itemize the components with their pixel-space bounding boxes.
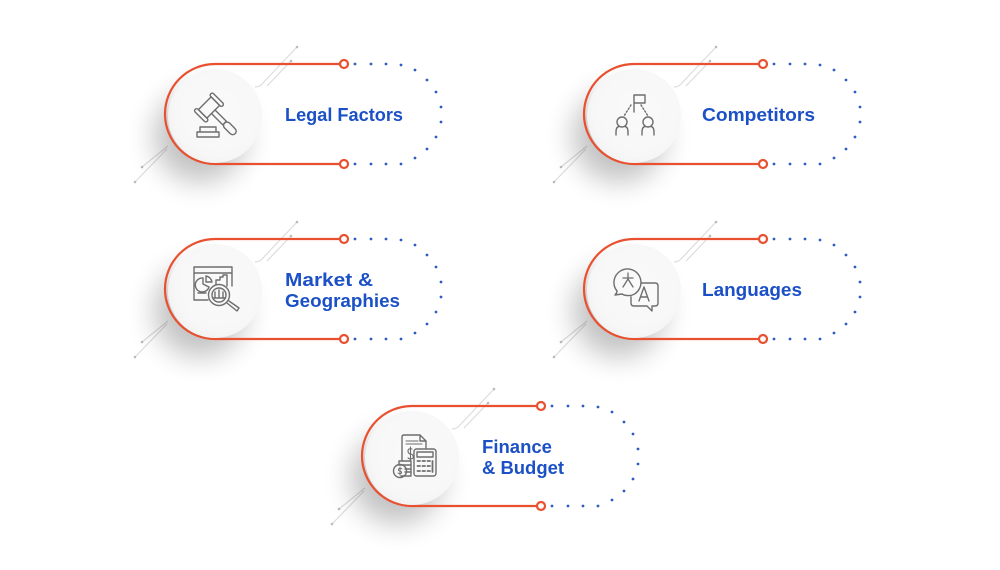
icon: translation bubbles	[614, 269, 658, 311]
disc shadow	[573, 90, 665, 182]
end node bottom	[340, 160, 348, 168]
dotted arc	[773, 238, 861, 340]
white disc	[587, 69, 681, 163]
orange outline	[165, 64, 344, 164]
card: Competitors	[553, 46, 861, 183]
white disc	[168, 69, 262, 163]
white disc	[587, 244, 681, 338]
end node top	[537, 402, 545, 410]
end node top	[759, 235, 767, 243]
orange outline	[584, 64, 763, 164]
disc shadow	[154, 265, 246, 357]
label: Legal Factors	[285, 105, 403, 125]
card: Market & Geographies	[134, 221, 442, 358]
label: Market &	[285, 270, 373, 290]
end node bottom	[340, 335, 348, 343]
decorative traces	[553, 46, 717, 183]
card: Legal Factors	[134, 46, 442, 183]
end node bottom	[759, 335, 767, 343]
label	[285, 270, 400, 311]
icon: people and flag	[616, 95, 654, 135]
orange outline	[362, 406, 541, 506]
dotted arc	[354, 63, 442, 165]
card: Languages	[553, 221, 861, 358]
label	[482, 437, 564, 478]
decorative traces	[553, 221, 717, 358]
card: Finance & Budget	[331, 388, 639, 525]
label: & Budget	[482, 458, 564, 478]
dotted arc	[354, 238, 442, 340]
end node top	[340, 60, 348, 68]
dotted arc	[773, 63, 861, 165]
icon: dashboard with magnifier	[194, 267, 239, 311]
orange outline	[584, 239, 763, 339]
white disc	[168, 244, 262, 338]
disc shadow	[351, 432, 443, 524]
decorative traces	[134, 46, 298, 183]
disc shadow	[573, 265, 665, 357]
end node bottom	[759, 160, 767, 168]
disc shadow	[154, 90, 246, 182]
orange outline	[165, 239, 344, 339]
label: Geographies	[285, 291, 400, 311]
end node bottom	[537, 502, 545, 510]
dotted arc	[551, 405, 639, 507]
icon: gavel	[194, 92, 244, 143]
label: Competitors	[702, 105, 815, 125]
decorative traces	[134, 221, 298, 358]
end node top	[759, 60, 767, 68]
decorative traces	[331, 388, 495, 525]
icon: invoice, calculator and coins	[394, 435, 436, 478]
white disc	[365, 411, 459, 505]
label: Finance	[482, 437, 552, 457]
label: Languages	[702, 280, 802, 300]
end node top	[340, 235, 348, 243]
